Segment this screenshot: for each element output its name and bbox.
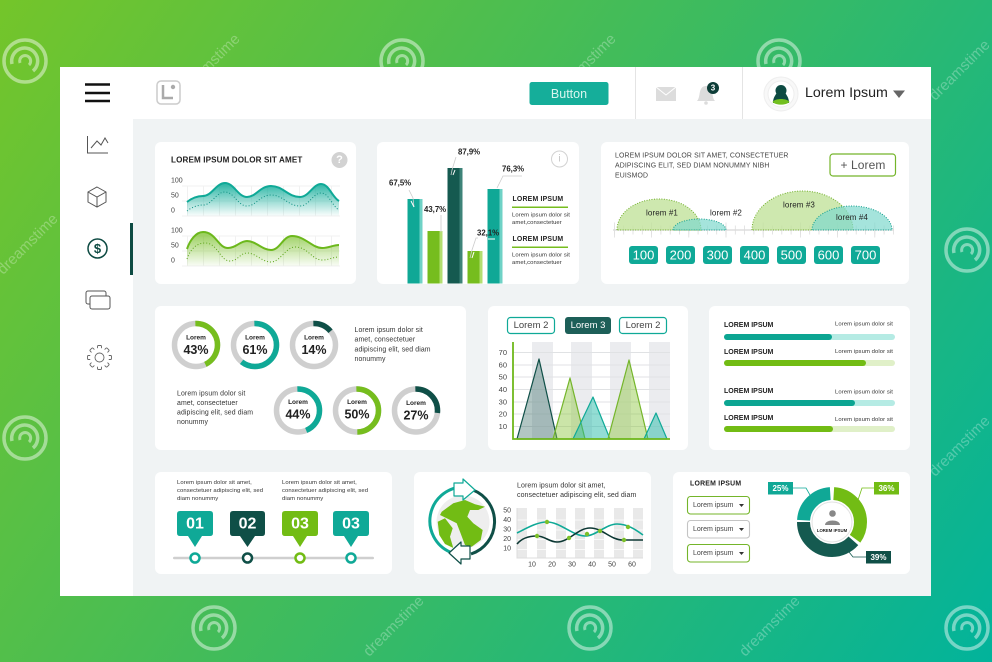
panel: progress bars [709, 306, 910, 450]
donut 61%: 61% [242, 343, 268, 357]
dashboard window [60, 67, 931, 596]
description [615, 152, 789, 180]
icon: gear [88, 346, 112, 370]
green area chart [171, 228, 340, 266]
panel: donut with selects [673, 472, 910, 574]
text block: Lorem ipsum dolor sit amet, [282, 480, 357, 486]
legend [512, 196, 570, 266]
text block [177, 480, 263, 502]
axis labels: 70 [499, 348, 507, 357]
progress 3: Lorem ipsum dolor sit [835, 390, 893, 396]
step 03 [282, 511, 318, 562]
icon: info [552, 151, 568, 167]
dome labels: lorem #4 [836, 213, 868, 222]
heading: LOREM IPSUM [690, 480, 741, 488]
text block: diam nonummy [177, 496, 218, 502]
line chart: 40 [588, 562, 596, 568]
watermarks: dreamstime [926, 413, 992, 480]
select 3: Lorem ipsum [693, 550, 734, 557]
icon: dollar: $ [94, 241, 102, 256]
donut chart: LOREM IPSUM [817, 528, 848, 533]
green area chart: 50 [171, 242, 179, 250]
scale buttons: 600 [818, 248, 839, 262]
icon: line chart [88, 136, 108, 153]
icon: cards [86, 291, 110, 309]
line chart: 50 [503, 508, 511, 514]
green area chart: 100 [171, 228, 183, 234]
icon: bell with badge: 3 [711, 84, 716, 92]
icon: help: ? [336, 154, 343, 166]
line chart: 60 [628, 562, 636, 568]
sidebar [60, 67, 133, 596]
text block: Lorem ipsum dolor sit amet, [517, 482, 606, 490]
heading: LOREM IPSUM DOLOR SIT AMET [171, 156, 302, 164]
progress 1: LOREM IPSUM [724, 322, 774, 329]
progress 4: Lorem ipsum dolor sit [835, 417, 893, 423]
avatar [764, 77, 798, 111]
button: add: + Lorem [840, 158, 886, 172]
donut 27%: 27% [403, 408, 429, 422]
icon: hamburger menu [85, 84, 110, 101]
watermarks: dreamstime [360, 593, 427, 660]
teal area chart: 0 [171, 208, 175, 214]
value labels: 43,7% [424, 205, 446, 214]
line chart: 10 [528, 562, 536, 568]
donut 14%: 14% [301, 343, 327, 357]
donut 14% [292, 324, 336, 366]
ruler [613, 229, 894, 231]
line chart [503, 508, 643, 568]
logo [157, 81, 180, 104]
progress 4: LOREM IPSUM [724, 415, 774, 422]
dome labels: lorem #3 [783, 200, 815, 210]
progress 1: Lorem ipsum dolor sit [835, 322, 893, 328]
leader lines [409, 157, 522, 258]
progress 4 [724, 415, 895, 432]
line chart: 20 [503, 536, 511, 543]
donut 50%: 50% [344, 408, 370, 422]
donut 50%: Lorem [347, 399, 367, 406]
legend: LOREM IPSUM [512, 236, 563, 243]
step 01: 01 [186, 516, 204, 532]
donut 50% [336, 389, 378, 432]
scale buttons [629, 246, 880, 264]
scale buttons: 500 [781, 248, 802, 262]
triangles [517, 359, 667, 439]
teal area chart [171, 178, 340, 216]
panel: timeline [155, 472, 392, 574]
chart grid [513, 342, 670, 439]
domes [617, 191, 892, 230]
icon: globe with arrows [430, 479, 495, 564]
select 1: Lorem ipsum [693, 502, 734, 509]
select 2: Lorem ipsum [693, 526, 734, 533]
line chart: 30 [503, 526, 511, 534]
icon: mail [656, 87, 676, 101]
panel: donut percentages [155, 306, 466, 450]
watermarks: dreamstime [552, 31, 619, 98]
text block: adipiscing elit, sed diam [354, 346, 431, 354]
step 03: 03 [291, 516, 309, 532]
line chart: 40 [503, 517, 511, 524]
axis labels: 20 [499, 410, 507, 418]
donut chart [804, 494, 860, 550]
step 03 [333, 511, 369, 562]
axis labels: 50 [499, 372, 507, 382]
text block: Lorem ipsum dolor sit amet, [177, 480, 252, 486]
legend: Lorem ipsum dolor sit [512, 212, 570, 218]
donut 44%: Lorem [288, 399, 308, 406]
progress 2 [724, 349, 895, 366]
axes [513, 342, 670, 439]
panel: bar chart [377, 142, 579, 284]
select 1 [688, 496, 750, 514]
teal area chart: 100 [171, 178, 183, 184]
text block: Lorem ipsum dolor sit [354, 327, 423, 334]
text block: amet, consectetuer [354, 336, 416, 344]
scale buttons: 700 [855, 248, 876, 262]
icon: info: i [558, 154, 561, 164]
progress 2: Lorem ipsum dolor sit [835, 349, 893, 355]
scale buttons: 300 [707, 248, 728, 262]
axis labels: 40 [499, 385, 507, 394]
text block [282, 480, 368, 502]
select 3 [688, 544, 750, 562]
description: EUISMOD [615, 172, 648, 180]
select 2 [688, 520, 750, 538]
text block [354, 327, 431, 363]
step 02 [230, 511, 265, 562]
text block: diam nonummy [282, 496, 323, 502]
donut 61%: Lorem [245, 334, 265, 342]
text block: amet, consectetuer [177, 400, 238, 407]
timeline track [173, 557, 374, 559]
value labels [389, 148, 524, 238]
text block: consectetuer adipiscing elit, sed diam [517, 492, 636, 499]
step 01 [177, 511, 213, 562]
top bar [133, 67, 931, 119]
step 02: 02 [239, 516, 256, 532]
donut 61% [234, 324, 276, 366]
button [530, 82, 608, 105]
icon: person [825, 510, 840, 525]
panel: globe and line chart [414, 472, 651, 574]
donut 14%: Lorem [304, 334, 324, 342]
tab buttons: Lorem 3 [571, 320, 605, 331]
description: ADIPISCING ELIT, SED DIAM NONUMMY NIBH [615, 162, 770, 170]
user name: Lorem Ipsum [805, 85, 888, 101]
panel: triangle chart [488, 306, 688, 450]
text block: consectetuer adipiscing elit, sed [177, 488, 263, 494]
donut 43% [174, 324, 218, 366]
donut 43%: Lorem [186, 334, 206, 342]
donut 44% [276, 389, 320, 432]
panel: area charts [155, 142, 356, 284]
scale buttons: 200 [670, 248, 691, 262]
icon: cube [88, 187, 106, 207]
callout 36% [858, 482, 899, 500]
donut 44%: 44% [285, 408, 311, 422]
callout 36%: 36% [878, 484, 895, 493]
value labels: 76,3% [502, 164, 524, 174]
callout 39% [849, 551, 891, 564]
legend: amet,consectetuer [512, 260, 562, 266]
watermarks: dreamstime [176, 31, 243, 98]
dropdown caret [893, 90, 905, 98]
line chart: 10 [503, 546, 511, 552]
text block [517, 482, 636, 499]
button: Button [551, 87, 587, 101]
text block: nonummy [354, 356, 386, 363]
watermarks: dreamstime [736, 593, 803, 660]
step 03: 03 [342, 516, 360, 532]
dome labels [646, 200, 868, 222]
legend: Lorem ipsum dolor sit [512, 252, 570, 258]
callout 39%: 39% [870, 553, 887, 562]
dome labels: lorem #1 [646, 208, 678, 218]
progress 1 [724, 322, 895, 340]
text block: nonummy [177, 419, 209, 426]
tab buttons: Lorem 2 [514, 320, 548, 331]
line chart: 50 [608, 562, 616, 568]
watermarks: dreamstime [926, 37, 992, 104]
green area chart: 0 [171, 258, 175, 264]
dome labels: lorem #2 [710, 208, 742, 218]
legend: amet,consectetuer [512, 220, 562, 226]
donut 27% [394, 389, 438, 432]
progress 2: LOREM IPSUM [724, 349, 774, 356]
tab buttons [508, 317, 666, 334]
scale buttons: 400 [744, 248, 765, 262]
icon: help [332, 152, 348, 168]
progress 3: LOREM IPSUM [724, 388, 774, 395]
text block: adipiscing elit, sed diam [177, 410, 253, 416]
donut 27%: Lorem [406, 400, 426, 407]
legend: LOREM IPSUM [512, 196, 563, 203]
text block [177, 390, 253, 426]
value labels: 87,9% [458, 148, 480, 156]
active indicator [130, 223, 133, 275]
line chart: 20 [548, 562, 556, 568]
icon: dollar [88, 239, 107, 258]
axis labels: 60 [499, 360, 507, 370]
axis labels: 30 [499, 398, 507, 406]
donut 43%: 43% [183, 343, 209, 357]
axis labels: 10 [499, 422, 507, 431]
tab buttons: Lorem 2 [626, 320, 660, 331]
scale buttons: 100 [633, 248, 654, 262]
icon: bell with badge [697, 82, 719, 105]
button: add [830, 154, 896, 176]
progress 3 [724, 388, 895, 406]
text block: consectetuer adipiscing elit, sed [282, 488, 368, 494]
value labels: 32,1% [477, 228, 499, 238]
axis labels [499, 348, 507, 431]
teal area chart: 50 [171, 192, 179, 200]
panel: range chart [601, 142, 909, 284]
description: LOREM IPSUM DOLOR SIT AMET, CONSECTETUER [615, 152, 789, 160]
callout 25%: 25% [772, 484, 789, 493]
line chart: 30 [568, 562, 576, 568]
callout 25% [768, 482, 810, 495]
text block: Lorem ipsum dolor sit [177, 390, 245, 398]
value labels: 67,5% [389, 178, 411, 188]
bars [408, 168, 502, 284]
